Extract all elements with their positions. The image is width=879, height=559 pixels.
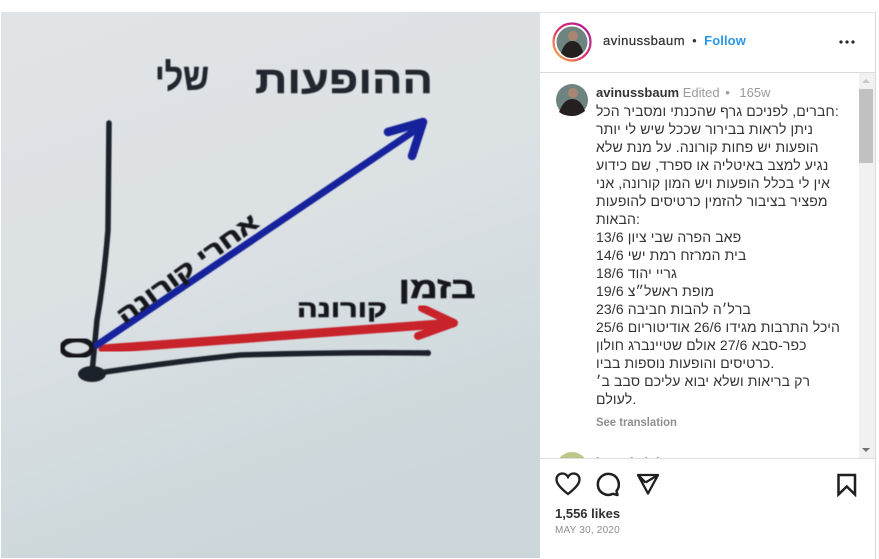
caption text: הופעות יש פחות קורונה. על מנת שלא [596, 139, 819, 155]
icon: scroll down [862, 448, 870, 452]
caption text: בית המרזח רמת ישי 14/6 [596, 247, 746, 263]
red arrow label [297, 272, 476, 323]
scrollbar thumb [859, 89, 873, 163]
red arrow label: קורונה [297, 296, 387, 323]
chart axes [78, 123, 431, 382]
graph title handwriting: ההופעות [255, 60, 433, 102]
icon: more options [839, 40, 855, 44]
icon: heart [555, 472, 581, 496]
blue arrow label: אחרי קורונה [112, 208, 263, 328]
caption text: ברל׳ה להבות חביבה 23/6 [596, 301, 751, 317]
see translation link: See translation [596, 415, 677, 429]
red arrow label: בזמן [398, 272, 476, 305]
icon: next commenter avatar, clipped [556, 452, 588, 484]
username and follow: avinussbaum • Follow [603, 33, 746, 48]
graph title handwriting [155, 57, 433, 102]
caption text: מופת ראשל״צ 19/6 [596, 283, 714, 299]
icon: share [636, 474, 660, 495]
caption author line: avinussbaum Edited • 165w [596, 85, 770, 100]
caption text: היכל התרבות מגידו 26/6 אודיטוריום 25/6 [596, 319, 840, 335]
caption text: הבאות: [596, 211, 640, 227]
caption text: פאב הפרה שבי ציון 13/6 [596, 229, 741, 245]
origin zero label [62, 340, 92, 356]
post header [540, 13, 875, 73]
icon: caption avatar [556, 84, 588, 116]
panel: photo of hand-drawn graph [1, 12, 540, 558]
graph title handwriting: שלי [155, 57, 209, 99]
caption text: כפר-סבא 27/6 אולם שטיינברג חולון [596, 337, 807, 353]
caption text: רק בריאות ושלא יבוא עליכם סבב ב׳ [596, 373, 810, 389]
caption text: מפציר בציבור להזמין כרטיסים להופעות [596, 193, 828, 209]
icon: bookmark [837, 474, 856, 497]
icon: comment [596, 472, 620, 496]
caption text [596, 103, 840, 407]
red arrow: during corona [103, 308, 454, 349]
caption text: גריי יהוד 18/6 [596, 265, 677, 281]
icon: scroll up [862, 79, 870, 83]
panel: post sidebar [540, 12, 876, 559]
comments scroll area [540, 73, 875, 458]
caption text: לעולם. [596, 391, 636, 407]
icon: profile avatar with story ring [552, 22, 592, 62]
post footer [540, 458, 875, 558]
caption text: נגיע למצב באיטליה או ספרד, שם כידוע [596, 157, 828, 173]
caption text: אין לי בכלל הופעות ויש המון קורונה, אני [596, 175, 830, 191]
caption text: כרטיסים והופעות נוספות בביו. [596, 355, 774, 371]
blue arrow: after corona [97, 122, 423, 345]
caption text: חברים, לפניכם גרף שהכנתי ומסביר הכל: [596, 103, 839, 119]
post date: MAY 30, 2020 [555, 525, 620, 536]
caption text: ניתן לראות בבירור שככל שיש לי יותר [596, 121, 813, 137]
likes count: 1,556 likes [555, 506, 620, 521]
scrollbar [859, 73, 875, 458]
